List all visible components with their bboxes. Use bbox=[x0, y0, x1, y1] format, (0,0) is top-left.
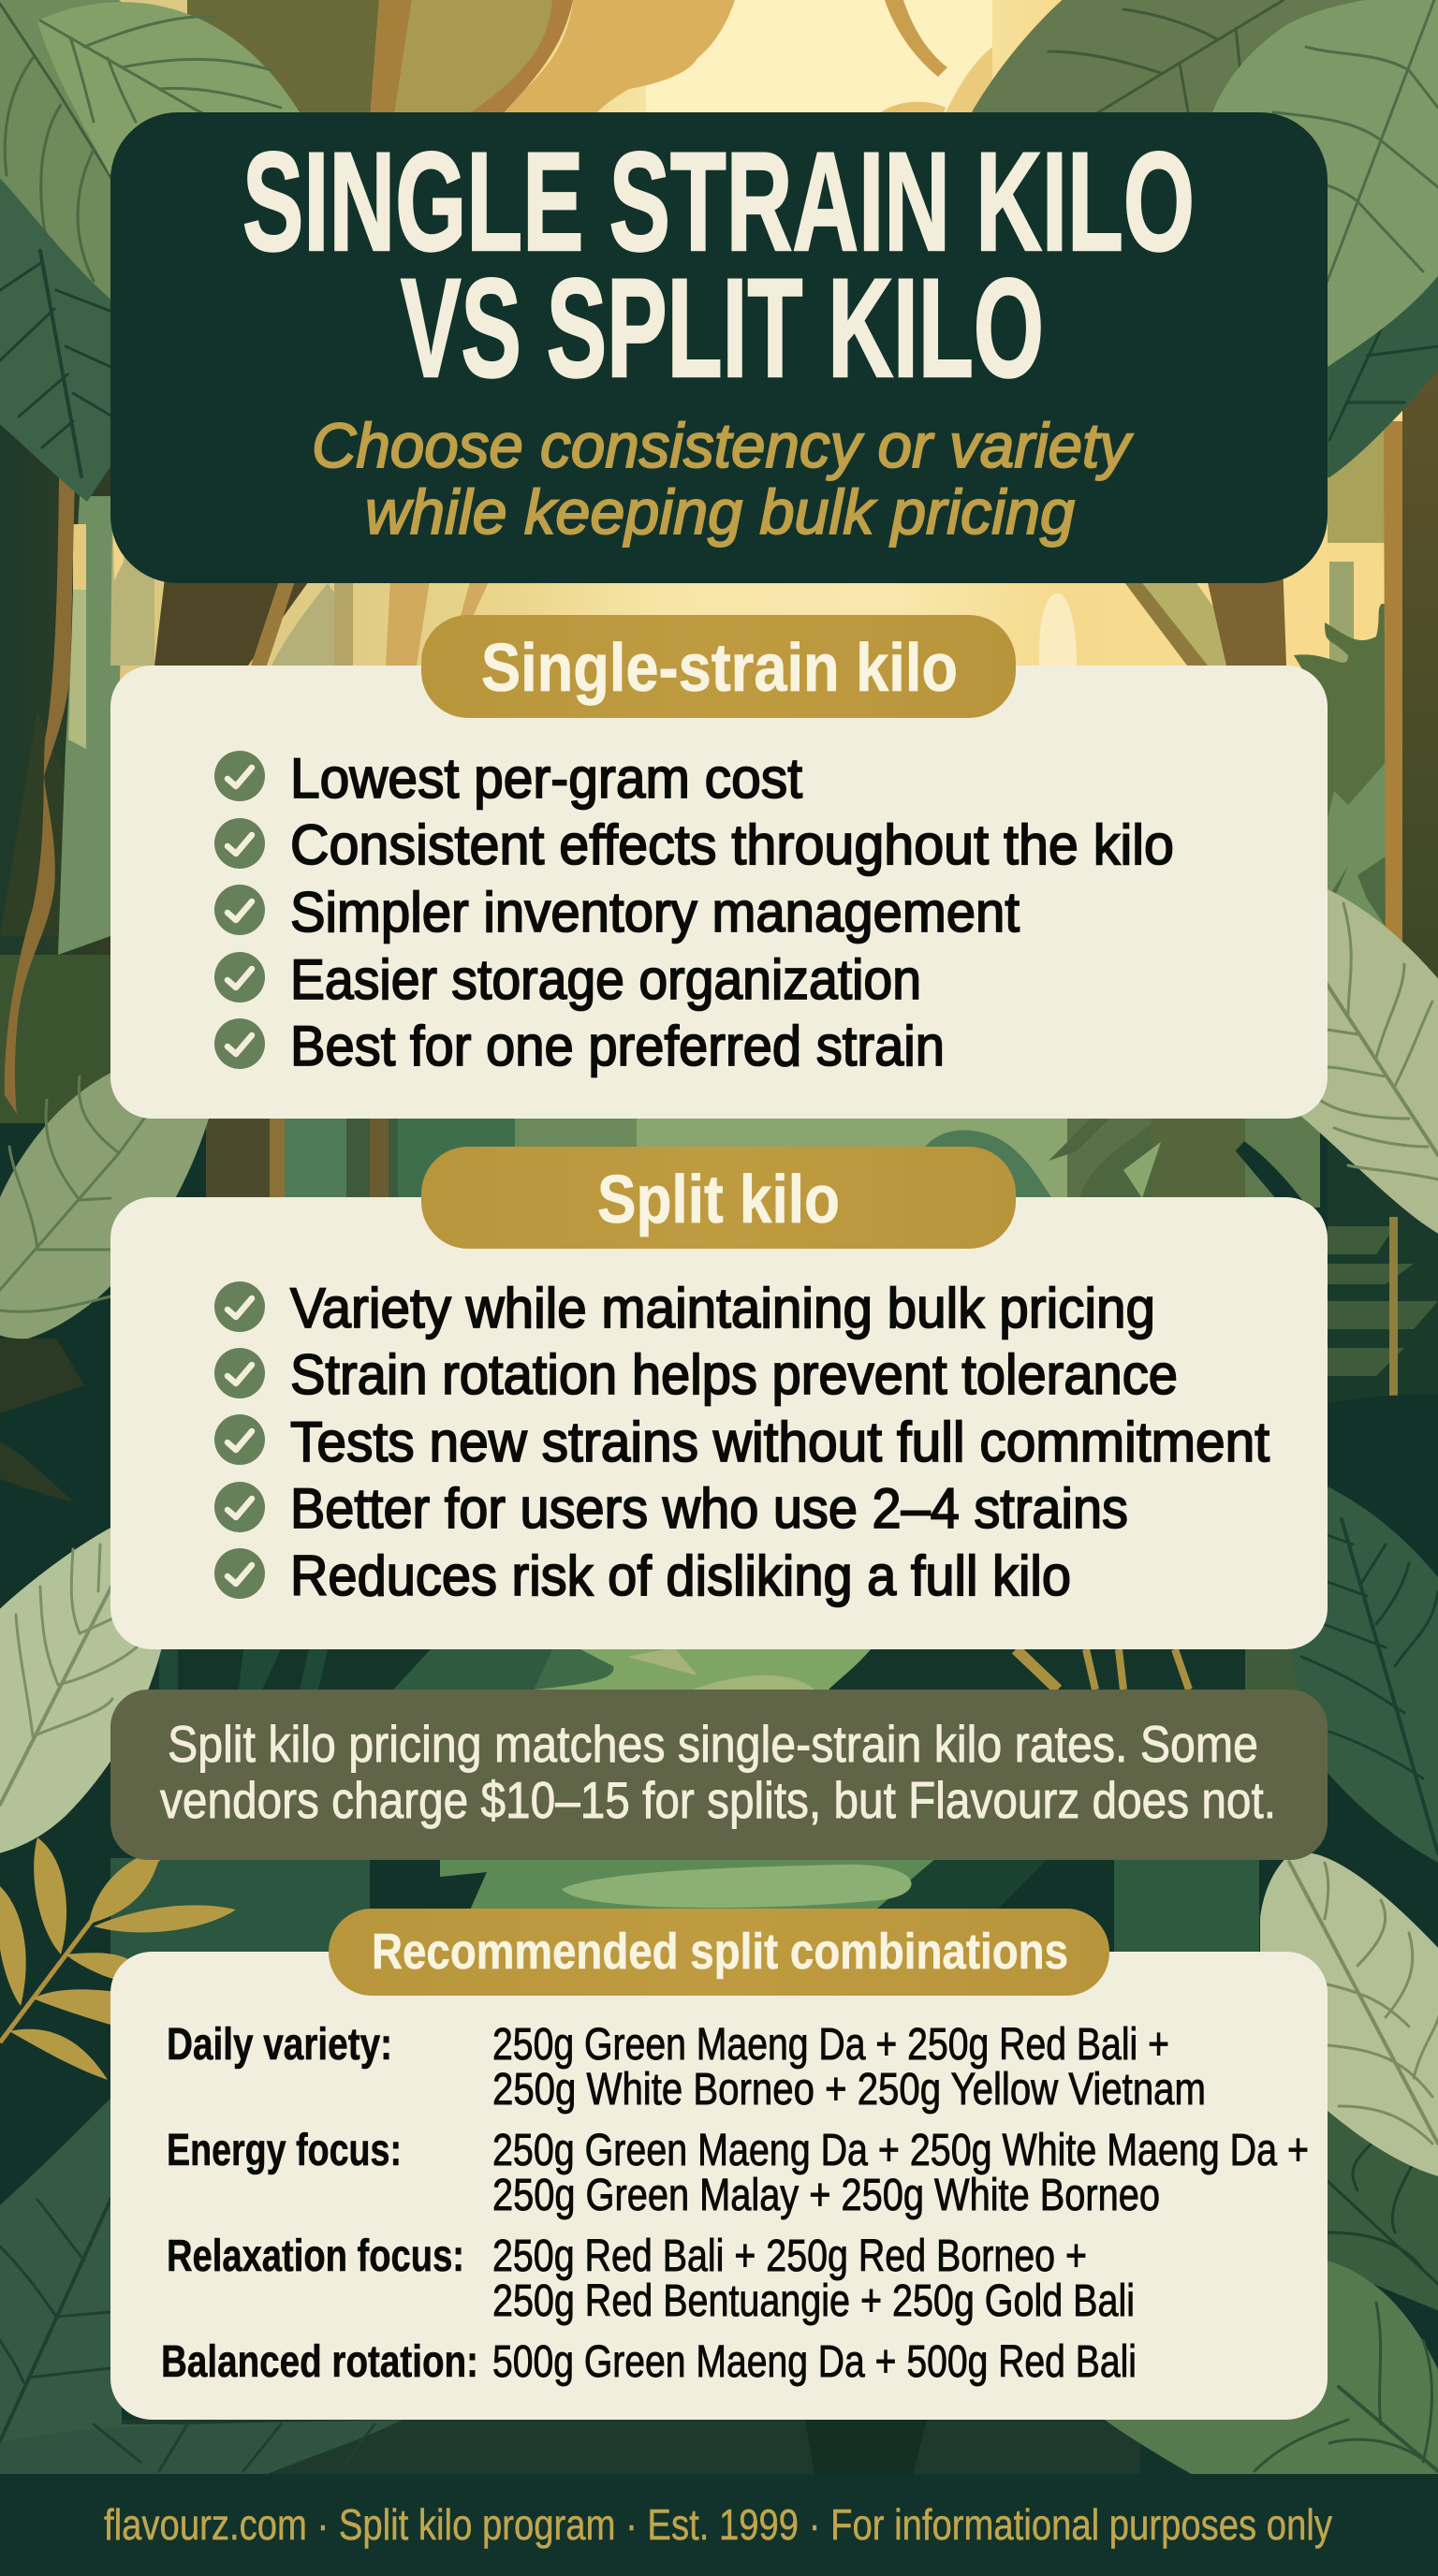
combination: relaxation focus: 250g Red Bentuangie + 250g Gold Bali bbox=[492, 2276, 1135, 2326]
leaf: right middle bbox=[1294, 889, 1438, 1236]
leaf: top right dark bbox=[1311, 262, 1438, 477]
panel: recommended split combinations bbox=[110, 1909, 1328, 2420]
leaf: bottom left bbox=[0, 2087, 403, 2481]
combination: balanced rotation: Balanced rotation: bbox=[161, 2337, 478, 2387]
combination: energy focus: 250g Green Malay + 250g White Borneo bbox=[492, 2171, 1160, 2220]
combination: relaxation focus bbox=[167, 2232, 1135, 2326]
combination: daily variety: 250g White Borneo + 250g Yellow Vietnam bbox=[492, 2065, 1206, 2115]
panel: single-strain kilo bbox=[110, 615, 1328, 1119]
panel: split kilo bbox=[110, 1147, 1328, 1649]
lower forest base bbox=[0, 1123, 1438, 2490]
badge: recommended split combinations: Recommended split combinations bbox=[372, 1924, 1068, 1980]
benefit list: split kilo bbox=[214, 1277, 1269, 1607]
strip below last panel bbox=[110, 2420, 1140, 2476]
combination: balanced rotation bbox=[161, 2337, 1137, 2387]
leaf: right lower pale bbox=[1260, 1852, 1438, 2177]
combination: daily variety: Daily variety: bbox=[167, 2020, 392, 2070]
top canopy shapes bbox=[187, 0, 992, 122]
benefit item: Strain rotation helps prevent tolerance bbox=[290, 1343, 1178, 1406]
subtitle: while keeping bulk pricing bbox=[365, 477, 1075, 548]
benefit list: single-strain kilo bbox=[214, 747, 1174, 1077]
combination: relaxation focus: Relaxation focus: bbox=[167, 2232, 464, 2281]
combination: energy focus: Energy focus: bbox=[167, 2126, 402, 2175]
callout: pricing note bbox=[110, 1690, 1328, 1860]
icon: check bbox=[214, 1414, 265, 1465]
icon: check bbox=[214, 952, 265, 1003]
combination: balanced rotation: 500g Green Maeng Da + 500g Red Bali bbox=[492, 2337, 1137, 2387]
footer band bbox=[0, 2474, 1438, 2576]
subtitle bbox=[312, 411, 1133, 548]
combination: daily variety bbox=[167, 2020, 1206, 2115]
clearing between panels bbox=[110, 1647, 1329, 1961]
icon: check bbox=[214, 1281, 265, 1332]
badge: recommended split combinations bbox=[329, 1909, 1109, 1996]
title: VS SPLIT KILO bbox=[401, 249, 1044, 406]
tree trunks right bbox=[1039, 262, 1438, 1123]
leaf: top right light bbox=[1211, 0, 1438, 367]
middle clearing bbox=[206, 1114, 1329, 1254]
header panel bbox=[110, 112, 1328, 583]
icon: check bbox=[214, 1018, 265, 1069]
combination: relaxation focus: 250g Red Bali + 250g Red Borneo + bbox=[492, 2232, 1087, 2281]
icon: check bbox=[214, 885, 265, 935]
benefit item: Tests new strains without full commitment bbox=[290, 1411, 1269, 1473]
leaf: top left mid bbox=[0, 0, 300, 318]
side darks behind split panel bbox=[0, 1123, 1438, 1582]
benefit item: Simpler inventory management bbox=[290, 881, 1020, 944]
leaf: right lower dark bbox=[1311, 2097, 1438, 2312]
badge: split kilo: Split kilo bbox=[597, 1163, 840, 1237]
leaf: lower left pale bbox=[0, 1507, 169, 1855]
title bbox=[242, 123, 1195, 406]
callout: pricing note: vendors charge $10–15 for splits, but Flavourz does not. bbox=[160, 1771, 1276, 1829]
benefit item: Lowest per-gram cost bbox=[290, 747, 802, 810]
sky glow bbox=[0, 0, 1438, 1123]
benefit item: Best for one preferred strain bbox=[290, 1015, 945, 1077]
benefit item: Better for users who use 2–4 strains bbox=[290, 1477, 1128, 1540]
badge: single-strain kilo bbox=[421, 615, 1016, 718]
badge: single-strain kilo: Single-strain kilo bbox=[481, 631, 958, 706]
badge: split kilo bbox=[421, 1147, 1016, 1249]
callout: pricing note: Split kilo pricing matches single-strain kilo rates. Some bbox=[168, 1715, 1258, 1773]
combination: energy focus bbox=[167, 2126, 1309, 2220]
leaf: top left dark bbox=[0, 168, 122, 502]
tree trunks left bbox=[0, 374, 498, 1123]
icon: check bbox=[214, 1482, 265, 1532]
subtitle: Choose consistency or variety bbox=[312, 411, 1133, 481]
gold fern bbox=[0, 1837, 236, 2080]
benefit item: Consistent effects throughout the kilo bbox=[290, 813, 1174, 876]
leaf: right dark bbox=[1290, 1486, 1438, 1865]
icon: check bbox=[214, 1348, 265, 1398]
icon: check bbox=[214, 818, 265, 869]
benefit item: Easier storage organization bbox=[290, 948, 921, 1011]
leaf: bottom right bbox=[1105, 2261, 1438, 2481]
leaf: top left light bbox=[37, 2, 300, 197]
icon: check bbox=[214, 751, 265, 801]
benefit item: Reduces risk of disliking a full kilo bbox=[290, 1544, 1071, 1607]
leaf: top right olive bbox=[969, 0, 1438, 117]
icon: check bbox=[214, 1548, 265, 1599]
benefit item: Variety while maintaining bulk pricing bbox=[290, 1277, 1155, 1339]
leaf: left middle bbox=[0, 1060, 209, 1339]
combination: daily variety: 250g Green Maeng Da + 250g Red Bali + bbox=[492, 2020, 1169, 2070]
